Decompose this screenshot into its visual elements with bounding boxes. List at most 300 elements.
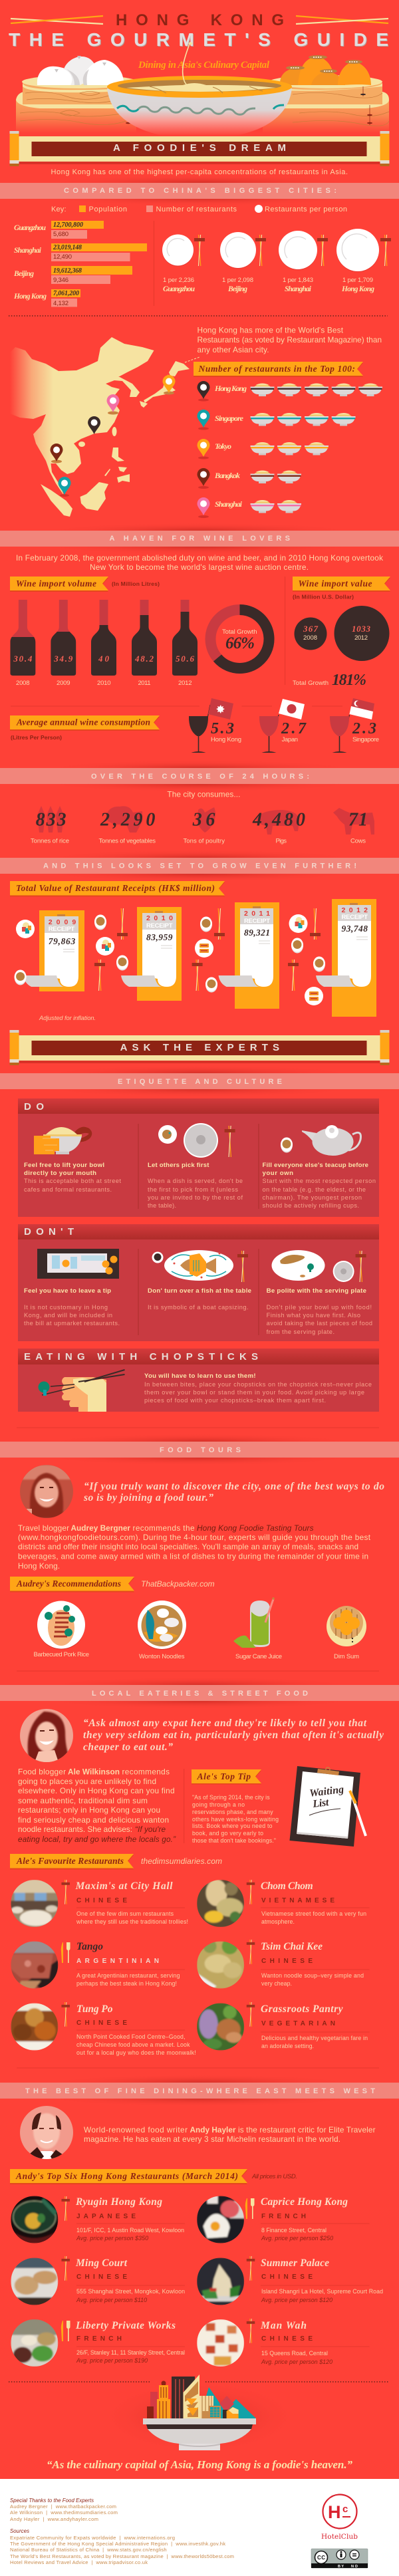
map pin: Bangkok <box>51 444 63 463</box>
receipt 2009: RECEIPT <box>49 926 74 933</box>
receipt 2011: 2011 <box>244 910 270 918</box>
top 100: Tokyo row <box>197 439 329 459</box>
wine intro text <box>16 553 383 572</box>
stat: rice <box>31 806 69 845</box>
portrait: Andy Hayler <box>20 2106 73 2159</box>
text: Ale's tip: reservations phase, and many <box>192 1809 273 1815</box>
text: fill teacup <box>262 1162 376 1209</box>
subtitle: Dining in Asia's Culinary Capital <box>138 60 270 70</box>
restaurant: Tsim Chai Kee: Tsim Chai Kee <box>261 1941 323 1952</box>
receipt 2011 <box>218 902 279 1009</box>
ribbon: Ale's top tip: Ale's Top Tip <box>197 1771 251 1781</box>
logo: HotelClub: H <box>328 2502 340 2522</box>
bottle 2009: 2009 <box>57 680 70 687</box>
ribbon: Audrey's recommendations <box>10 1577 215 1592</box>
donut chart: total growth 66%: 66% <box>225 634 255 652</box>
wine glass: Hong Kong <box>189 698 241 753</box>
hero illustration: steamers and noodle bowl <box>16 42 389 136</box>
plate: Shanghai <box>279 231 328 293</box>
restaurant: Tsim Chai Kee: Wanton noodle soup–very simple and <box>261 1972 364 1979</box>
city: Hong Kong: Hong Kong <box>13 293 47 301</box>
text: leave a tip: Kong, and will be included in <box>24 1312 112 1319</box>
icon: teapot and cup <box>281 1125 360 1156</box>
ribbon: average annual wine consumption: (Litres Per Person) <box>11 734 62 741</box>
credits: sources: Expatriate Community for Expats worldwide | www.internations.org <box>10 2535 175 2541</box>
ribbon: wine import value: Wine import value <box>298 579 372 588</box>
band: food tours: FOOD TOURS <box>160 1446 241 1454</box>
bottle 2010 <box>90 600 117 687</box>
bottle 2010: 40 <box>98 654 109 664</box>
logo: HotelClub: c <box>342 2504 348 2515</box>
text: chopstick advice: In between bites, place your chopsticks on the chopstick rest–never place <box>144 1381 372 1388</box>
restaurant: Tung Po: cheap Chinese food above a market. Look <box>76 2041 190 2048</box>
restaurant: Grassroots Pantry: VEGETARIAN <box>261 2020 335 2027</box>
text: let others pick first: the first to pick from it (unless <box>148 1186 238 1193</box>
receipt chart <box>15 899 376 1017</box>
map pin: Singapore <box>59 477 70 497</box>
dish: dim sum basket: Dim Sum <box>334 1653 359 1660</box>
badge: creative commons: ND <box>351 2565 358 2569</box>
plate: Guangzhou: 1 per 2,236 <box>163 277 194 284</box>
photo: Maxim's <box>11 1879 59 1927</box>
bubble chart: wine import value <box>293 606 390 689</box>
band: 24 hours: OVER THE COURSE OF 24 HOURS: <box>91 773 309 781</box>
receipt 2012: RECEIPT <box>342 914 368 921</box>
dish: wonton noodles: Wonton Noodles <box>139 1653 185 1660</box>
city: Beijing <box>13 266 132 284</box>
text: Ale paragraph: “If you're <box>135 1825 166 1834</box>
restaurant: Summer Palace: Island Shangri La Hotel, Supreme Court Road <box>261 2288 383 2295</box>
text: Audrey paragraph: districts and offer their insight into local specialties. You'll sample an array of meals, snacks and <box>18 1542 358 1551</box>
restaurant: Tango: perhaps the best steak in Hong Kong! <box>76 1980 177 1987</box>
text: leave a tip: the bill at upmarket restaurants. <box>24 1320 120 1327</box>
intro text: Hong Kong has one of the highest per-capita concentrations of restaurants in Asia. <box>51 168 348 176</box>
text: Audrey paragraph: Hong Kong Foodie Tasting Tours <box>197 1523 314 1533</box>
restaurant: Maxim's: One of the few dim sum restaurants <box>76 1910 174 1917</box>
text: world's best restaurants: Hong Kong has more of the World's Best <box>197 326 344 335</box>
dish: barbecued pork rice: Barbecued Pork Rice <box>33 1651 89 1658</box>
right chopsticks <box>296 16 388 24</box>
quote: Ale <box>83 1718 384 1753</box>
text: lift your bowl: This is acceptable both at street <box>24 1178 121 1184</box>
band: wine lovers <box>0 523 399 555</box>
plate: Hong Kong <box>336 229 391 293</box>
quote: Ale: “Ask almost any expat here and they're likely to tell you that <box>83 1718 367 1729</box>
photo: Chom Chom <box>197 1879 245 1927</box>
text: leave a tip: It is not customary in Hong <box>24 1304 108 1311</box>
text: Ale paragraph: restaurants; only in Hong Kong can you <box>18 1805 160 1815</box>
wine intro text: New York to become the world's largest wine auction centre. <box>90 563 309 572</box>
text: Ale's tip <box>192 1794 279 1844</box>
text: Andy intro: is the restaurant critic for Elite Traveler <box>238 2125 376 2134</box>
text: Andy intro <box>84 2125 376 2144</box>
restaurant: Tung Po: North Point Cooked Food Centre–Good, <box>76 2033 186 2040</box>
text: serving plate: Be polite with the serving plate <box>267 1287 366 1295</box>
top 100: Hong Kong row: Hong Kong <box>214 384 247 393</box>
restaurant: Tsim Chai Kee: CHINESE <box>261 1958 313 1965</box>
restaurant: Ming Court: Avg. price per person $110 <box>76 2297 147 2303</box>
text: Audrey paragraph: beverages, and come away armed with a list of dishes to try during the remainder of your time in <box>18 1552 368 1561</box>
bottle chart: wine import volume <box>9 600 198 687</box>
credits: sources: Sources <box>10 2528 29 2534</box>
text: fill teacup: your own <box>262 1170 293 1177</box>
city: Beijing: Beijing <box>13 270 34 278</box>
towers <box>150 2392 158 2418</box>
ribbon: average annual wine consumption: Average annual wine consumption <box>16 717 150 727</box>
text: Audrey paragraph: Audrey Bergner <box>70 1523 130 1533</box>
icon: chopsticks <box>247 1940 255 1964</box>
footer <box>0 2479 399 2576</box>
icon: waiting list clipboard <box>290 1766 366 1847</box>
restaurant: Man Wah <box>197 2319 370 2367</box>
city: Hong Kong: 4,132 <box>53 300 68 307</box>
credits: food experts <box>10 2498 118 2522</box>
text: Ale's tip: lists. Book where you need to <box>192 1823 273 1829</box>
credits: sources: The World's Best Restaurants, as voted by Restaurant magazine | www.theworlds50best.com <box>10 2553 234 2559</box>
text: Audrey paragraph: recommends the <box>133 1523 195 1533</box>
credits: sources: Hotel Reviews and Travel Advice | www.tripadvisor.co.uk <box>10 2559 148 2565</box>
ribbon: total value of restaurant receipts: Total Value of Restaurant Receipts (HK$ million) <box>16 883 215 893</box>
restaurant: Tung Po: Tung Po <box>76 2003 113 2015</box>
text: Ale paragraph: noodle restaurants. She advises: <box>18 1825 132 1834</box>
photo: Man Wah <box>197 2319 245 2367</box>
Borneo <box>80 482 108 511</box>
map of Asia <box>10 337 200 517</box>
restaurant: Summer Palace: CHINESE <box>261 2273 313 2281</box>
restaurant: Ming Court <box>11 2256 185 2305</box>
restaurant: Chom Chom: atmosphere. <box>261 1918 295 1925</box>
restaurant: Grassroots Pantry: Delicious and healthy vegetarian fare in <box>261 2035 368 2041</box>
wine glass: Singapore: 2.3 <box>352 720 376 737</box>
icon: chopsticks <box>247 1880 255 1904</box>
plate: Shanghai: 1 per 1,843 <box>283 277 313 284</box>
wine glass: Hong Kong: Hong Kong <box>211 736 241 743</box>
restaurant: Tango: ARGENTINIAN <box>76 1958 159 1965</box>
restaurant: Man Wah: Avg. price per person $120 <box>261 2359 332 2365</box>
icon: chopsticks <box>61 1880 70 1904</box>
text: let others pick first: you are invited to by the rest of <box>148 1194 243 1201</box>
daily consumption stats <box>31 806 374 845</box>
text: Ale paragraph: Food blogger <box>18 1767 66 1777</box>
band: wine lovers: A HAVEN FOR WINE LOVERS <box>109 535 290 543</box>
China and Southeast Asia <box>10 337 154 495</box>
plate: Guangzhou: Guangzhou <box>163 285 196 293</box>
badge: creative commons: BY <box>338 2565 344 2569</box>
plate: Hong Kong: Hong Kong <box>341 285 374 293</box>
bottle 2012: 50.6 <box>176 654 194 664</box>
photo: Tung Po <box>11 2003 59 2051</box>
restaurant: Maxim's: Maxim's at City Hall <box>75 1880 173 1892</box>
band: 24 hours <box>0 760 399 792</box>
text: lift your bowl: cafes and formal restaurants. <box>24 1186 112 1193</box>
wine glass: Japan <box>259 699 307 753</box>
credits: food experts: Audrey Bergner | www.thatbackpacker.com <box>10 2504 116 2510</box>
portrait: Audrey Bergner <box>20 1465 73 1518</box>
restaurant: Chom Chom <box>197 1879 370 1927</box>
badge: creative commons: CC <box>317 2555 325 2561</box>
panel: eating with chopsticks: EATING WITH CHOPSTICKS <box>24 1351 258 1362</box>
stat: pigs <box>252 810 305 845</box>
receipt 2012 <box>316 899 376 1017</box>
stat: vegetables <box>98 806 156 845</box>
ribbon: top 100 <box>194 362 363 377</box>
band: local eateries: LOCAL EATERIES & STREET FOOD <box>92 1690 308 1698</box>
text: Ale's tip: others have weeks-long waiting <box>192 1816 279 1823</box>
bar chart: population and restaurants <box>13 221 147 307</box>
plate: Guangzhou <box>162 234 205 293</box>
city: Guangzhou: 5,680 <box>53 231 68 238</box>
photo: Grassroots Pantry <box>197 2003 245 2051</box>
restaurant: Caprice <box>197 2196 370 2244</box>
icon: fork and knife <box>61 2321 70 2341</box>
restaurant: Chom Chom: Chom Chom <box>261 1880 313 1892</box>
text: let others pick first <box>148 1162 243 1209</box>
wine glass: Singapore <box>330 698 379 753</box>
right steamer <box>263 55 389 133</box>
text: don't turn over a fish <box>148 1287 251 1311</box>
noodle bowl <box>107 42 292 136</box>
quote: Audrey: so is by joining a food tour.” <box>83 1492 213 1503</box>
text: Ale paragraph: eating local, try and go where the locals go.” <box>18 1835 176 1844</box>
photo: Liberty Private Works <box>11 2319 59 2367</box>
Hainan <box>78 442 85 447</box>
text: Ale's tip: "As of Spring 2014, the city is <box>192 1794 270 1801</box>
icon: fork and knife <box>245 2198 254 2219</box>
restaurant: Liberty Private Works: Liberty Private Works <box>75 2320 176 2331</box>
text: Ale paragraph: recommends <box>122 1767 170 1777</box>
dish: wonton noodles <box>138 1601 186 1660</box>
restaurant: Summer Palace: Avg. price per person $120 <box>261 2297 332 2303</box>
panel: do: DO <box>24 1101 44 1112</box>
stat: cows: Cows <box>350 838 366 845</box>
text: world's best restaurants: Restaurants (as voted by Restaurant Magazine) than <box>197 335 382 344</box>
restaurant: Ming Court: 555 Shanghai Street, Mongkok, Kowloon <box>76 2288 185 2295</box>
drink: sugar cane juice <box>233 1597 282 1660</box>
bottle 2012: 2012 <box>178 680 192 687</box>
panel: don't: DON'T <box>24 1226 74 1237</box>
text: lift your bowl: directly to your mouth <box>24 1170 96 1177</box>
photo: Caprice <box>197 2196 245 2244</box>
text: Ale paragraph: find seriously cheap and delicious wanton <box>18 1815 169 1825</box>
icon: lifting a bowl <box>34 1127 92 1154</box>
stat: rice: 833 <box>36 810 66 831</box>
restaurant: Summer Palace <box>197 2256 383 2305</box>
text: Andy intro: magazine. He has eaten at every 3 star Michelin restaurant in the world. <box>84 2134 340 2144</box>
stat: pigs: Pigs <box>275 838 287 845</box>
plate: Hong Kong: 1 per 1,709 <box>342 277 373 284</box>
Sumatra <box>41 484 72 517</box>
dish: barbecued pork rice <box>33 1601 89 1658</box>
restaurant: Ryugin: 101/F, ICC, 1 Austin Road West, Kowloon <box>76 2227 184 2234</box>
section scroll: ask the experts: ASK THE EXPERTS <box>120 1042 279 1053</box>
legend: Key: <box>51 205 66 213</box>
table decorations <box>15 908 325 1005</box>
restaurant: Tung Po <box>11 2002 196 2056</box>
plate: Beijing: Beijing <box>227 285 247 293</box>
left chopsticks <box>11 16 103 24</box>
band: food tours <box>0 1434 399 1466</box>
city: Shanghai: 12,490 <box>53 253 72 261</box>
text: let others pick first: Let others pick first <box>148 1162 209 1169</box>
icon: plates and chopsticks <box>158 1123 235 1158</box>
credits: sources: National Bureau of Statistics of China | www.stats.gov.cn/english <box>10 2547 167 2553</box>
icon: chopsticks <box>61 2002 70 2027</box>
receipt 2011: RECEIPT <box>244 918 270 925</box>
receipt 2010 <box>121 907 182 1001</box>
band: compared to china: COMPARED TO CHINA'S BIGGEST CITIES: <box>64 187 336 195</box>
restaurant: Chom Chom: Vietnamese street food with a very fun <box>261 1910 366 1917</box>
city consumes intro: The city consumes... <box>167 790 240 799</box>
panel: don't <box>18 1224 379 1341</box>
text: serving plate: Finish what you have first. Also <box>267 1312 360 1319</box>
text: Ale paragraph: elsewhere. Only in Hong Kong can you find <box>18 1786 174 1795</box>
quote: Ale: cheaper to eat out.” <box>83 1741 173 1753</box>
map pin: Hong Kong <box>88 416 100 434</box>
top 100: Bangkok row: Bangkok <box>214 471 240 480</box>
ribbon: average annual wine consumption <box>10 715 160 741</box>
text: Audrey paragraph <box>18 1523 371 1571</box>
receipt 2009: 2009 <box>49 918 76 926</box>
icon: chopsticks <box>247 2256 255 2281</box>
restaurant: Man Wah: CHINESE <box>261 2335 313 2343</box>
ribbon: wine import value <box>293 577 390 600</box>
band: set to grow: AND THIS LOOKS SET TO GROW EVEN FURTHER! <box>43 862 356 870</box>
stat: pigs: 4,480 <box>252 810 305 831</box>
top 100: Singapore row: Singapore <box>215 414 244 423</box>
city: Hong Kong <box>13 289 80 307</box>
bubble chart: wine import value: 2008 <box>303 634 317 642</box>
restaurant: Ming Court: Ming Court <box>75 2257 128 2269</box>
wine glass: Hong Kong: 5.3 <box>211 720 234 737</box>
icon: chopsticks <box>61 2256 70 2281</box>
restaurant: Liberty Private Works <box>11 2319 185 2367</box>
mountains <box>200 2387 256 2418</box>
text: fill teacup: Fill everyone else's teacup before <box>262 1162 368 1169</box>
text: Andy intro: Andy Hayler <box>190 2125 236 2134</box>
ribbon: top 100: Number of restaurants in the Top 100: <box>198 364 355 374</box>
credits: food experts: Andy Hayler | www.andyhayler.com <box>10 2516 98 2522</box>
text: serving plate: Don't pile your bowl up with food! <box>267 1304 372 1311</box>
restaurant: Liberty Private Works: 26/F, Stanley 11, 11 Stanley Street, Central <box>76 2349 185 2356</box>
text: Audrey paragraph: Travel blogger <box>18 1523 69 1533</box>
bubble chart: wine import value: 1033 <box>352 624 371 634</box>
restaurant: Man Wah: 15 Queens Road, Central <box>261 2350 328 2357</box>
ribbon: Andy's top six <box>10 2169 297 2184</box>
portrait: Ale Wilkinson <box>20 1709 73 1762</box>
note: adjusted for inflation: Adjusted for inflation. <box>39 1015 96 1021</box>
restaurant: Grassroots Pantry: Grassroots Pantry <box>261 2003 343 2015</box>
Taiwan <box>112 427 117 436</box>
Japan <box>140 361 190 408</box>
plate: Shanghai: Shanghai <box>285 285 312 293</box>
text: serving plate: from the serving plate. <box>267 1329 334 1335</box>
ribbon: Audrey's recommendations: Audrey's Recommendations <box>16 1579 121 1589</box>
icon: fork and knife <box>61 1942 70 1963</box>
band: set to grow <box>0 850 399 882</box>
bottle 2008: 2008 <box>16 680 29 687</box>
icon: waiting list clipboard: List <box>311 1797 330 1810</box>
credits: sources <box>10 2528 234 2565</box>
bubble chart: wine import value: Total Growth <box>293 680 329 687</box>
stat: vegetables: 2,290 <box>100 810 155 831</box>
text: serving plate <box>267 1287 372 1335</box>
city: Shanghai: 23,019,148 <box>53 244 82 251</box>
text: leave a tip <box>24 1287 120 1327</box>
restaurant: Man Wah: Man Wah <box>260 2320 307 2331</box>
donut chart: total growth 66% <box>210 610 269 668</box>
top 100: Hong Kong row <box>197 381 382 402</box>
city: Beijing: 9,346 <box>53 277 68 284</box>
city: Hong Kong: 7,061,200 <box>53 290 79 297</box>
receipt 2010: 2010 <box>146 914 173 922</box>
band: fine dining: THE BEST OF FINE DINING-WHERE EAST MEETS WEST <box>25 2087 375 2095</box>
logo: HotelClub: HotelClub <box>321 2533 358 2541</box>
restaurant: Maxim's: where they still use the traditional trollies! <box>76 1918 188 1925</box>
plate: Beijing: 1 per 2,098 <box>222 277 253 284</box>
city: Shanghai: Shanghai <box>14 247 42 255</box>
bottle 2009 <box>50 600 76 687</box>
top 100: Bangkok row <box>197 468 301 489</box>
city: Guangzhou: Guangzhou <box>14 224 47 232</box>
bottle 2011 <box>131 600 158 687</box>
ribbon: wine import volume: Wine import volume <box>16 579 96 588</box>
bubble chart: wine import value: 181% <box>332 672 366 689</box>
bottle 2011: 2011 <box>138 680 150 687</box>
text: lift your bowl: Feel free to lift your bowl <box>24 1162 104 1169</box>
band: etiquette: ETIQUETTE AND CULTURE <box>118 1078 282 1086</box>
restaurant: Ryugin <box>11 2196 185 2244</box>
restaurant: Liberty Private Works: FRENCH <box>76 2335 122 2343</box>
drink: sugar cane juice: Sugar Cane Juice <box>235 1653 282 1660</box>
bubble chart: wine import value: 2012 <box>354 634 368 642</box>
restaurant: Tango <box>11 1941 185 1989</box>
receipt 2012: 93,748 <box>342 924 368 934</box>
text: chopstick advice: pieces of food with your chopsticks–break them apart first. <box>144 1397 326 1404</box>
photo: Ming Court <box>11 2257 59 2305</box>
band: fine dining <box>0 2075 399 2107</box>
credits: food experts: Ale Wilkinson | www.thedimsumdiaries.com <box>10 2510 118 2515</box>
legend: Population <box>89 205 127 213</box>
ribbon: total value of restaurant receipts <box>10 881 225 896</box>
restaurant: Caprice: FRENCH <box>261 2213 306 2220</box>
restaurant: Tango: A great Argentinian restaurant, serving <box>76 1972 180 1979</box>
text: Andy intro: World-renowned food writer <box>84 2125 188 2134</box>
stat: cows: 71 <box>348 810 368 831</box>
text: serving plate: avoid taking the last pieces of food <box>267 1320 372 1327</box>
text: world's best restaurants: any other Asian city. <box>197 345 269 354</box>
restaurant: Summer Palace: Summer Palace <box>261 2257 329 2269</box>
logo: HotelClub <box>321 2495 358 2541</box>
map pin: Tokyo <box>162 375 176 395</box>
stat: poultry: Tons of poultry <box>184 838 225 845</box>
icon: money tray <box>37 1249 119 1279</box>
text: fill teacup: should be actively refilling cups. <box>262 1202 359 1209</box>
credits: food experts: Special Thanks to the Food Experts <box>10 2498 94 2504</box>
text: Ale paragraph: some authentic, traditional dim sum <box>18 1796 148 1805</box>
wine glass: Japan: Japan <box>282 736 298 743</box>
receipt 2009: 79,863 <box>49 936 75 946</box>
city: Guangzhou: 12,700,800 <box>53 221 83 229</box>
wine glass: Japan: 2.7 <box>281 720 307 737</box>
illustration: Hong Kong skyline in a bowl <box>100 2375 299 2454</box>
receipt 2009 <box>23 910 84 991</box>
text: Audrey paragraph: Hong Kong. <box>18 1561 60 1571</box>
ribbon: Audrey's recommendations: ThatBackpacker.com <box>141 1579 215 1589</box>
bubble chart: wine import value: 367 <box>303 624 318 634</box>
restaurant: Caprice: Avg. price per person $250 <box>261 2235 333 2242</box>
text: fill teacup: chairman). The youngest person <box>262 1194 362 1201</box>
Philippines <box>104 448 130 483</box>
